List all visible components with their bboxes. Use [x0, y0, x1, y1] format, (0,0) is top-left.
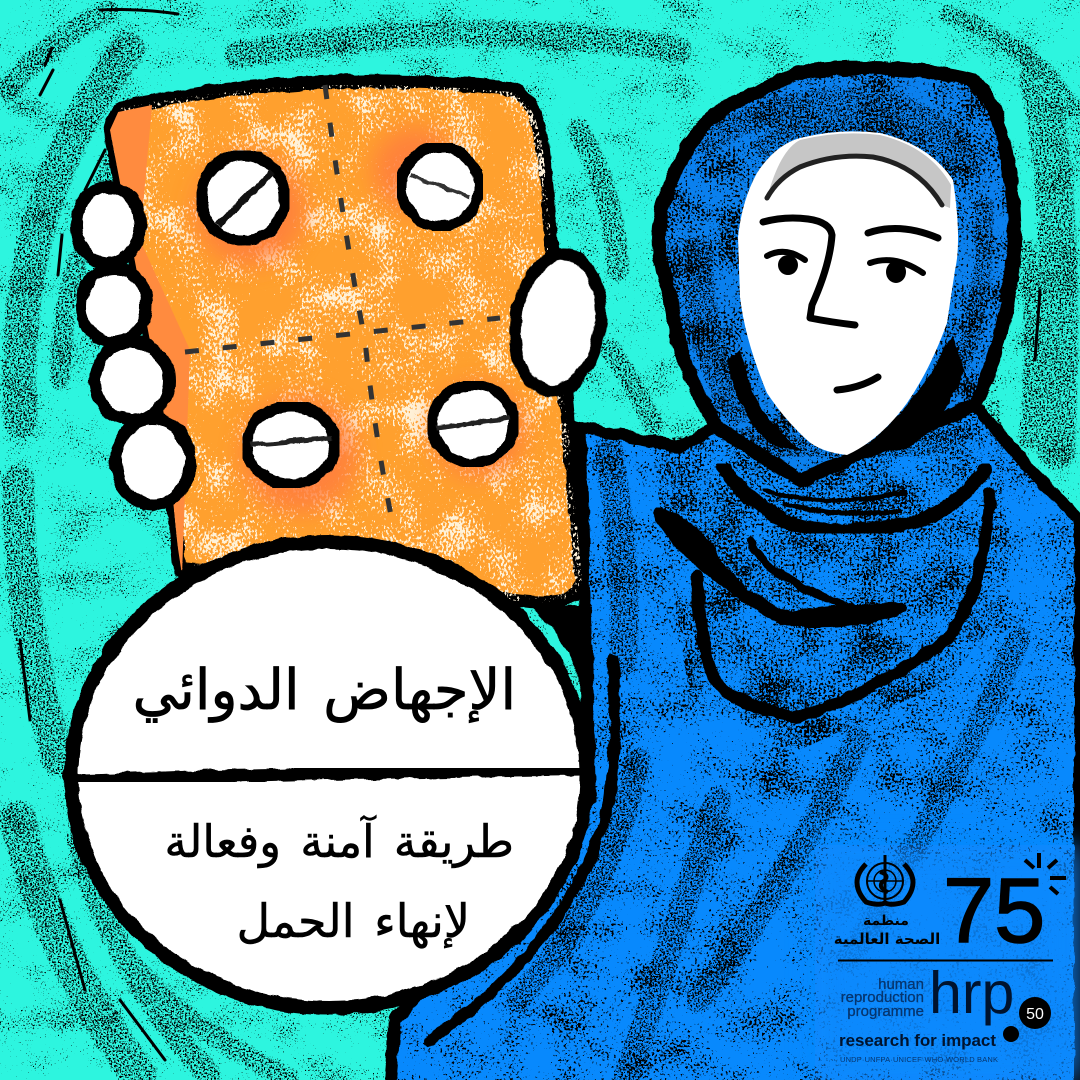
right eye: [870, 260, 923, 283]
face: [738, 131, 958, 455]
hairband: [767, 133, 951, 208]
robe brush folds: [520, 450, 1020, 1075]
face shape: [738, 131, 958, 455]
mouth: [837, 377, 878, 390]
right eyebrow: [868, 229, 938, 238]
title: الإجهاض الدوائي: [133, 658, 516, 723]
robe texture: [380, 400, 1080, 1080]
logo: HRP: programme: [847, 1003, 924, 1020]
scarf black wedge fold: [660, 513, 900, 622]
scarf lower loop: [697, 493, 990, 717]
hrp wordmark: hrp: [929, 960, 1014, 1026]
scarf inner fold: [750, 540, 863, 610]
hood: [650, 60, 1030, 490]
hood shape: [659, 68, 1015, 480]
card: [110, 81, 582, 603]
paper texture: [110, 85, 590, 605]
logo divider: [838, 960, 1053, 962]
tablet shadows: [195, 128, 524, 513]
75 rays: [1025, 853, 1066, 894]
finger 2: [81, 268, 147, 342]
hood brush shading: [700, 100, 986, 420]
perforation lines: [185, 85, 500, 535]
scarf wrinkles: [765, 490, 905, 514]
WHO emblem: [857, 855, 913, 905]
logo backing wash: [815, 845, 1080, 1080]
tablet 4: [432, 385, 514, 463]
scarf folds: [660, 430, 990, 717]
50 badge: 50: [1026, 1006, 1044, 1023]
black wedge under blister: [532, 606, 592, 695]
finger 3: [95, 342, 169, 420]
finger 1: [76, 187, 140, 263]
pill body: [71, 542, 587, 1008]
hand: fingers and thumb: [76, 187, 609, 505]
logo: WHO 75: [834, 853, 1066, 962]
75 numeral: 75: [943, 860, 1045, 962]
figure: woman's body in blue robe: [380, 400, 1080, 1080]
dot: [1003, 1026, 1019, 1042]
large pill with message: [70, 542, 588, 1008]
logo: WHO 75: الصحة العالمية: [834, 930, 940, 948]
chin shadow: [728, 335, 965, 452]
blister pack: [108, 81, 590, 605]
tablet 1: [201, 155, 285, 241]
sponsors: UNDP·UNFPA·UNICEF·WHO·WORLD BANK: [840, 1055, 998, 1064]
blue robe: [390, 405, 1080, 1080]
50 badge: [1019, 997, 1051, 1029]
scarf collar band: [723, 467, 985, 530]
scarf collar texture: [740, 430, 960, 455]
eyebrows and nose: [763, 218, 855, 325]
logo: HRP: reproduction: [841, 989, 924, 1006]
research for impact: research for impact: [839, 1031, 996, 1050]
hrp programme name: human: [878, 976, 924, 993]
arm line: [430, 660, 615, 1040]
WHO Arabic name: منظمة: [863, 913, 909, 929]
subtitle line 1: طريقة آمنة وفعالة: [165, 814, 514, 869]
logo: HRP: [839, 960, 1051, 1064]
hood texture: [665, 74, 1008, 473]
hairline: [767, 156, 942, 205]
subtitle line 2: لإنهاء الحمل: [237, 894, 470, 948]
tablet 2: [401, 147, 479, 227]
scarf dense texture: [640, 400, 1020, 760]
left eye: [767, 252, 805, 275]
tablet 3: [247, 406, 335, 484]
pill score line: [70, 769, 588, 781]
orange left side: [108, 105, 190, 575]
thumb: [507, 249, 609, 397]
finger 4: [116, 419, 190, 505]
